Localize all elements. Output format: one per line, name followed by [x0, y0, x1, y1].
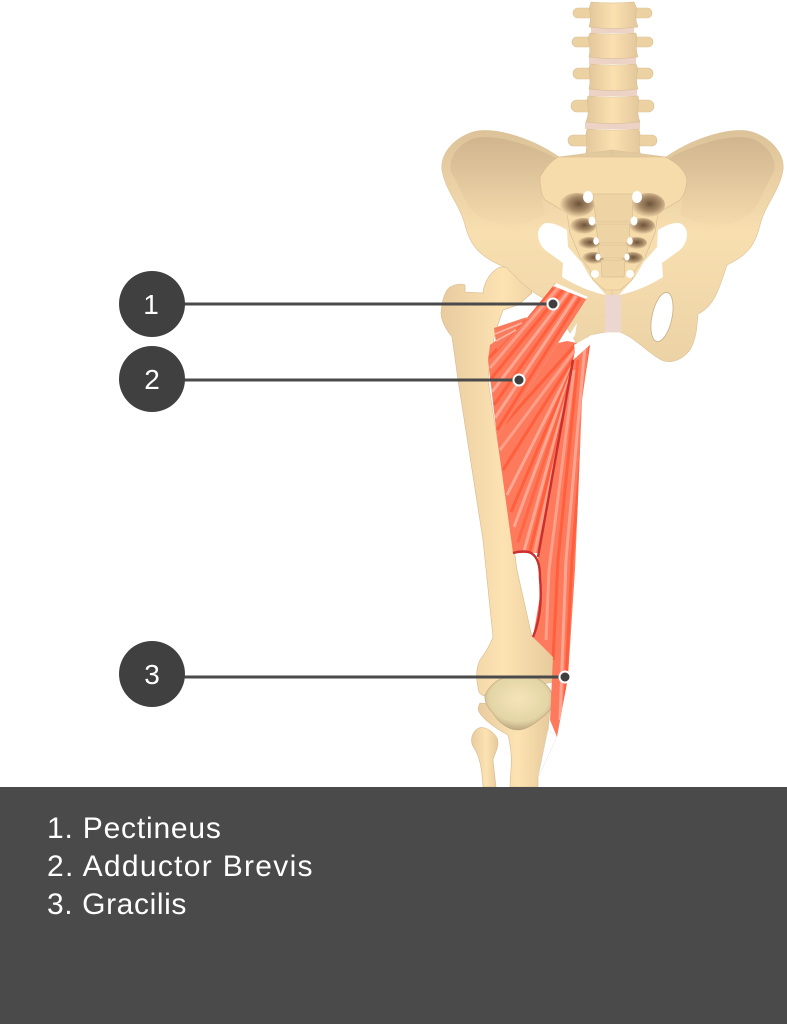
leader 3 [180, 672, 570, 682]
pelvis [442, 130, 783, 362]
muscle: gracilis [533, 345, 590, 737]
right hip bone [612, 130, 783, 362]
legend panel [0, 787, 787, 1024]
muscle: upper adductor bundle [494, 317, 527, 350]
pubic symphysis [605, 295, 621, 332]
sacral central segments [593, 194, 633, 277]
sacral foramina [583, 191, 642, 278]
intervertebral discs [585, 27, 640, 164]
marker 2 [119, 346, 185, 412]
sacrum [540, 157, 687, 290]
vertebral bodies [585, 2, 641, 158]
marker 2: 2 [144, 364, 160, 395]
left sciatic notch [538, 223, 606, 295]
left iliac fossa [450, 137, 556, 225]
legend panel: 3. Gracilis [47, 888, 187, 921]
legend panel: 1. Pectineus [47, 812, 222, 845]
femur [441, 267, 555, 696]
muscle: pectineus [485, 280, 590, 440]
fibula [472, 728, 498, 787]
patella [485, 678, 553, 730]
obturator foramen [647, 290, 677, 344]
right iliac fossa [669, 137, 775, 225]
marker 3: 3 [144, 659, 160, 690]
red border of adductor hiatus [513, 360, 573, 637]
marker 1 [119, 271, 185, 337]
marker 1: 1 [143, 289, 159, 320]
right sciatic notch [619, 223, 687, 295]
legend panel: 2. Adductor Brevis [47, 850, 314, 883]
spine [568, 2, 657, 164]
leader 2 [180, 374, 524, 386]
gap beside pubis [566, 323, 577, 343]
lower leg bones [472, 678, 553, 787]
sacral fossae [560, 193, 594, 217]
leader 1 [180, 298, 558, 310]
tibia [478, 703, 550, 787]
left hip bone [442, 130, 612, 345]
marker 3 [119, 641, 185, 707]
muscle: adductor brevis [497, 341, 577, 553]
white tendons [538, 283, 588, 778]
transverse processes [568, 8, 657, 146]
